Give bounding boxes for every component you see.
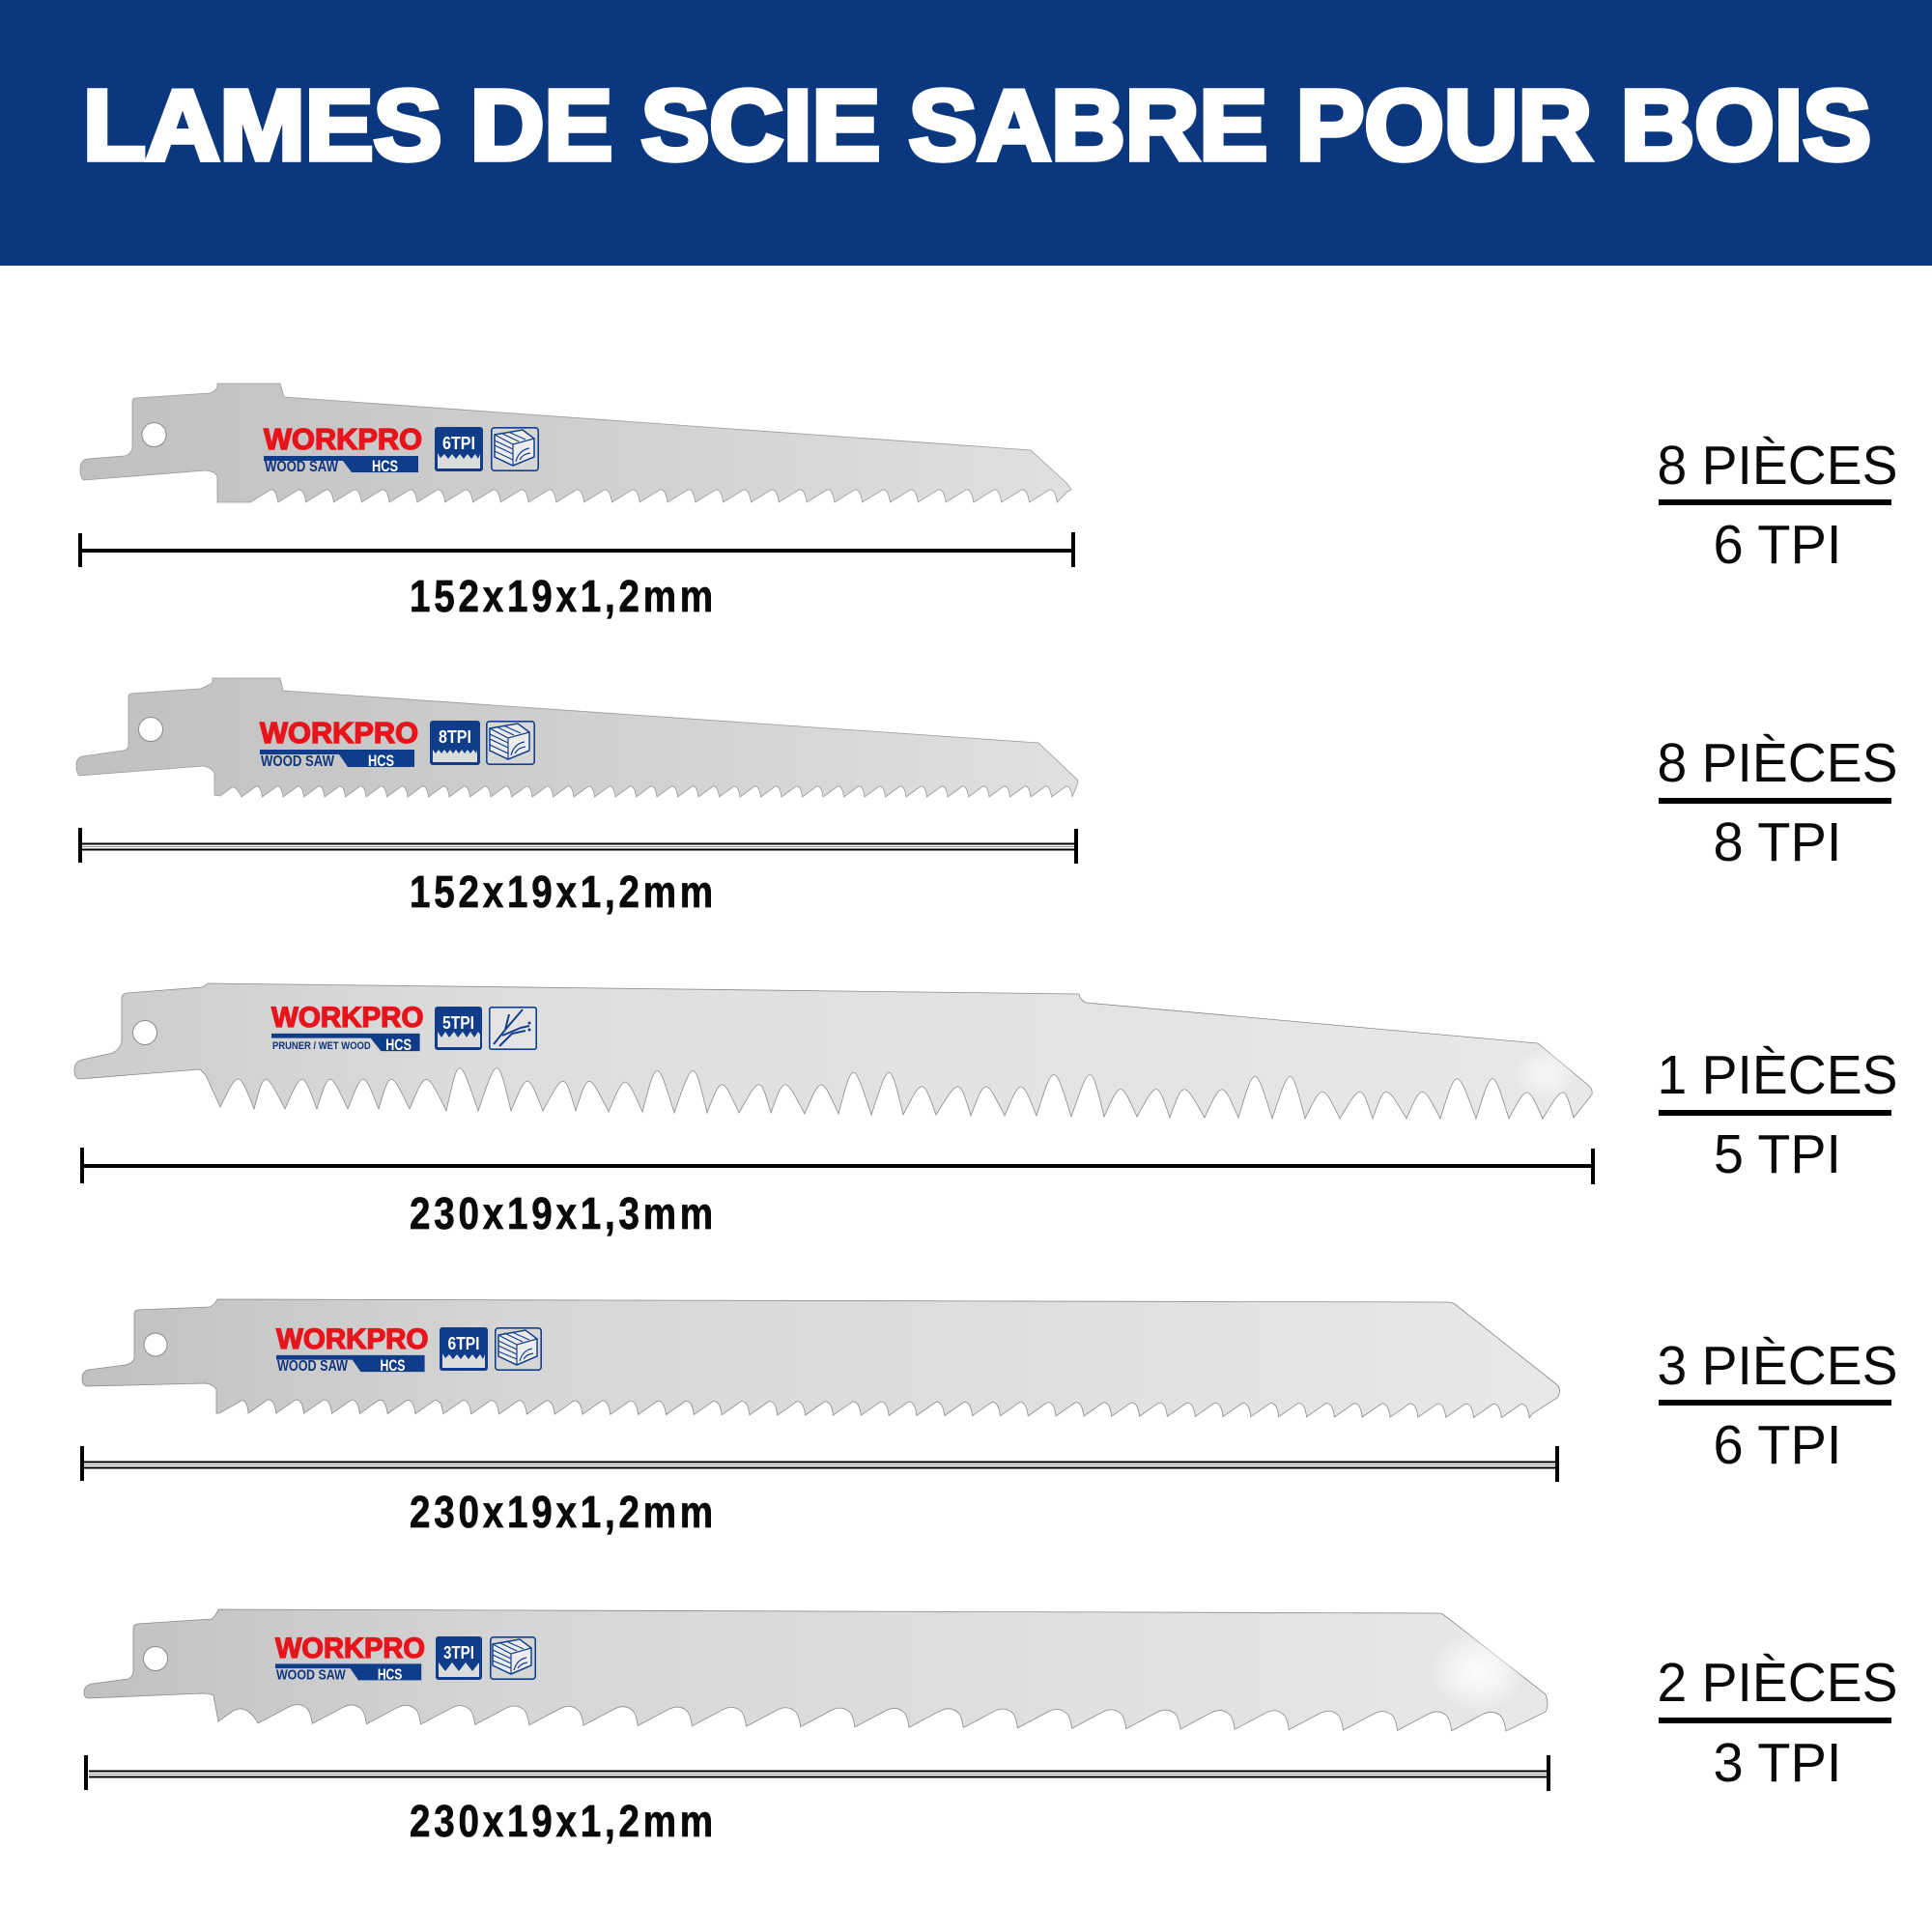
dimension line 152 mm [78, 532, 1075, 567]
icon: 3 TPI badge [436, 1636, 482, 1680]
quantity and TPI: 3 PIÈCES [1658, 1335, 1897, 1397]
panel: blade row 3 [74, 983, 1897, 1238]
logo: WORKPRO wood saw [260, 716, 418, 770]
logo: WORKPRO wood saw [275, 1633, 425, 1683]
logo: WORKPRO wood saw [276, 1323, 428, 1375]
mounting hole [142, 423, 166, 446]
logo: WORKPRO wood saw: HCS [378, 1665, 403, 1683]
quantity and TPI: 8 PIÈCES [1658, 435, 1897, 497]
mounting hole [133, 1020, 156, 1045]
logo: WORKPRO wood saw: HCS [372, 457, 398, 475]
logo: WORKPRO wood saw: WOOD SAW [261, 753, 335, 770]
icon: wood block [496, 1328, 541, 1370]
dimension label: 152x19x1,2mm [410, 572, 713, 621]
dimension line 230 mm [80, 1148, 1595, 1184]
panel: blade row 5 [84, 1609, 1897, 1846]
quantity and TPI: 3 TPI [1714, 1732, 1841, 1794]
icon: 5 TPI badge: 5TPI [442, 1013, 474, 1033]
quantity and TPI [1658, 1044, 1897, 1185]
quantity and TPI: 6 TPI [1714, 1414, 1841, 1476]
icon: 8 TPI badge: 8TPI [439, 727, 471, 747]
icon: 6 TPI badge [435, 427, 483, 471]
title: LAMES DE SCIE SABRE POUR BOIS [83, 70, 1871, 181]
mounting hole [139, 717, 162, 742]
logo: WORKPRO wood saw: WORKPRO [260, 716, 418, 750]
quantity and TPI [1658, 1335, 1897, 1476]
icon: wood block [492, 428, 538, 470]
dimension label: 230x19x1,2mm [410, 1488, 713, 1537]
quantity and TPI: 8 PIÈCES [1658, 732, 1897, 794]
dimension line 230 mm double rule [84, 1755, 1550, 1791]
saw blade 3 [74, 983, 1592, 1119]
blade tip highlight [1430, 1631, 1526, 1712]
logo: WORKPRO pruner [271, 1002, 423, 1054]
quantity and TPI [1658, 435, 1897, 576]
icon: 6 TPI badge: 6TPI [448, 1334, 479, 1353]
logo: WORKPRO wood saw: HCS [381, 1357, 406, 1375]
quantity and TPI: 6 TPI [1714, 514, 1841, 576]
panel: blade row 2 [76, 678, 1897, 917]
mounting hole [144, 1333, 167, 1356]
dimension line 152 mm double rule [78, 828, 1078, 864]
header band [0, 0, 1932, 266]
saw blade 1 [80, 384, 1071, 502]
logo: WORKPRO wood saw [264, 422, 422, 475]
mounting hole [143, 1646, 168, 1671]
quantity and TPI [1658, 1652, 1897, 1794]
logo: WORKPRO pruner: PRUNER / WET WOOD [272, 1040, 371, 1052]
saw blade 5 [84, 1609, 1548, 1731]
quantity and TPI: 8 TPI [1714, 811, 1841, 873]
logo: WORKPRO wood saw: WOOD SAW [265, 459, 339, 475]
logo: WORKPRO wood saw: HCS [368, 752, 394, 770]
quantity and TPI: 2 PIÈCES [1658, 1652, 1897, 1714]
panel: blade row 4 [80, 1299, 1897, 1537]
icon: wood block [491, 1637, 535, 1679]
logo: WORKPRO wood saw: WOOD SAW [276, 1666, 346, 1683]
logo: WORKPRO wood saw: WORKPRO [264, 422, 422, 456]
icon: wood block [487, 722, 534, 764]
icon: 5 TPI badge [435, 1007, 482, 1050]
logo: WORKPRO pruner: WORKPRO [271, 1002, 423, 1034]
logo: WORKPRO pruner: HCS [385, 1037, 412, 1054]
icon: tree branch [490, 1008, 536, 1049]
saw blade 2 [76, 678, 1078, 797]
saw blade 4 [82, 1299, 1560, 1418]
dimension label: 230x19x1,3mm [410, 1189, 713, 1238]
logo: WORKPRO wood saw: WORKPRO [275, 1633, 425, 1664]
logo: WORKPRO wood saw: WOOD SAW [277, 1358, 348, 1375]
icon: 6 TPI badge: 6TPI [442, 434, 475, 453]
dimension label: 152x19x1,2mm [410, 867, 713, 917]
logo: WORKPRO wood saw: WORKPRO [276, 1323, 428, 1355]
blade tip highlight [1515, 1047, 1577, 1101]
quantity and TPI: 1 PIÈCES [1658, 1044, 1897, 1106]
quantity and TPI [1658, 732, 1897, 873]
dimension label: 230x19x1,2mm [410, 1797, 713, 1846]
panel: blade row 1 [78, 384, 1897, 621]
icon: 3 TPI badge: 3TPI [443, 1643, 474, 1662]
dimension line 230 mm double rule [80, 1446, 1559, 1482]
icon: 6 TPI badge [440, 1327, 488, 1371]
quantity and TPI: 5 TPI [1714, 1123, 1841, 1185]
icon: 8 TPI badge [430, 721, 480, 765]
